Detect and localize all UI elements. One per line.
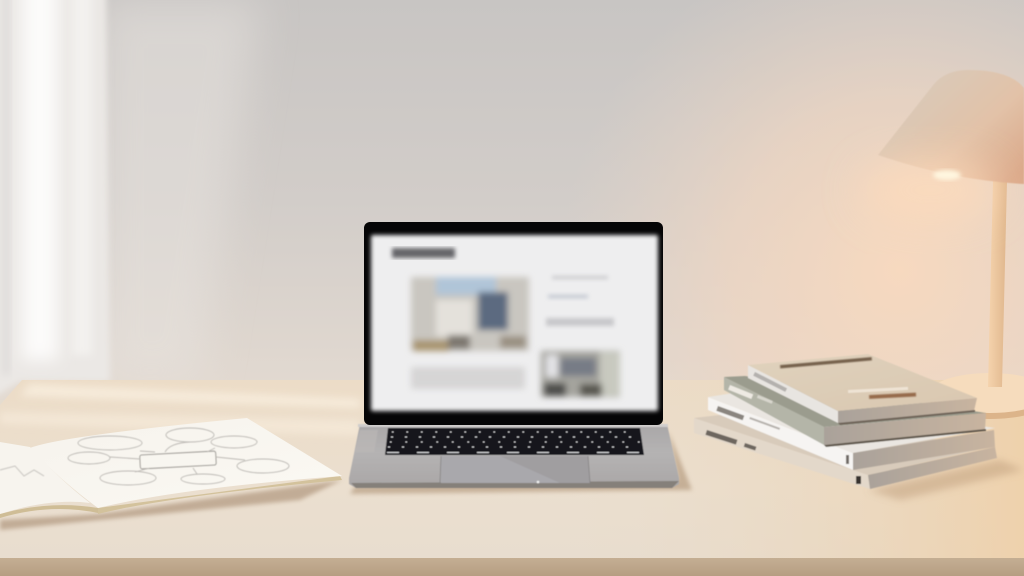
open notebook with mind map	[0, 418, 342, 530]
lamp shade	[878, 70, 1024, 184]
lamp bulb glow	[860, 158, 1000, 222]
blurred screen heading	[392, 248, 455, 258]
window curtain	[0, 0, 110, 405]
blurred small photo	[541, 351, 620, 397]
desk surface	[0, 380, 1024, 560]
light streaks on desk	[0, 384, 360, 436]
laptop base	[349, 424, 679, 488]
laptop	[349, 222, 692, 494]
wall background with lamp glow	[0, 0, 1024, 400]
book 1: top tan	[748, 354, 977, 425]
mind map sketch	[68, 428, 289, 485]
laptop lid	[364, 222, 663, 425]
book 2: sage	[724, 376, 986, 447]
left page sketch	[0, 466, 44, 476]
right page	[30, 418, 342, 514]
lamp pole	[988, 180, 1007, 387]
trackpad	[440, 456, 590, 483]
left page	[0, 442, 98, 518]
laptop desk shadow	[350, 430, 692, 494]
book 3: white	[708, 392, 995, 470]
book stack	[694, 354, 1024, 500]
book shadow	[868, 460, 1024, 500]
desk front edge	[0, 558, 1024, 576]
lamp foot	[930, 373, 1024, 419]
table lamp	[860, 70, 1024, 419]
book 4: beige	[694, 415, 997, 489]
blurred sidebar text	[546, 276, 614, 326]
blurred body text	[411, 367, 525, 389]
keyboard	[385, 428, 644, 455]
notebook shadow	[0, 480, 342, 530]
blurred building photo	[411, 277, 529, 351]
laptop screen	[371, 235, 658, 411]
